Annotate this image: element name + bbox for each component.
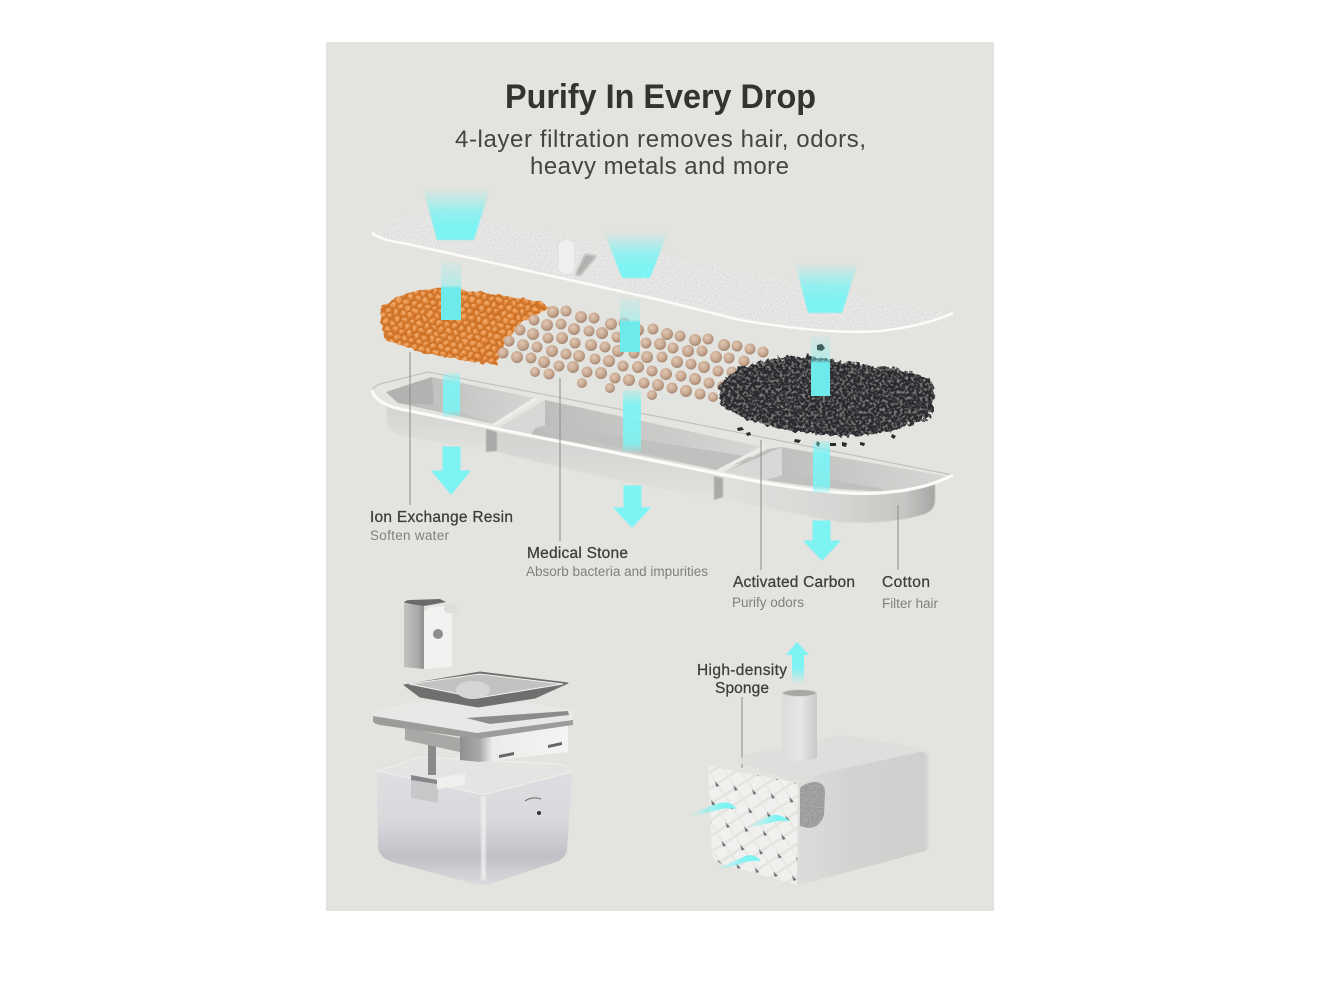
funnel three: [795, 262, 858, 313]
skirt one: [387, 402, 497, 453]
arrow one: [432, 447, 470, 494]
filter cap: [411, 775, 437, 784]
label: ion exchange resin: [370, 509, 513, 543]
pump knob: [433, 629, 443, 639]
funnel two: [604, 232, 668, 278]
label: activated carbon: [732, 574, 855, 610]
column one upper: [441, 262, 461, 320]
pump head top: [404, 599, 446, 606]
funnel one: [423, 188, 490, 240]
cotton pad: [372, 208, 953, 331]
skirt two: [497, 432, 715, 500]
compartment one side wall: [386, 377, 434, 405]
water flow: funnels and columns: [423, 188, 858, 560]
pump nozzle: [444, 604, 458, 613]
label: activated carbon: Purify odors: [732, 595, 804, 610]
compartment three: [725, 447, 945, 491]
tray support tabs: [486, 429, 723, 500]
tank: [377, 757, 572, 885]
pump head grey side: [404, 604, 424, 669]
compartment floors: [425, 404, 882, 491]
leader lines: [410, 352, 898, 768]
background panel: [326, 42, 994, 911]
label: high-density sponge: Sponge: [715, 680, 769, 697]
steel tray inner: [409, 674, 563, 698]
up arrow: [786, 642, 809, 684]
front white rim edge: [372, 390, 953, 494]
pump side: [797, 752, 931, 885]
lid slots: [499, 742, 562, 758]
cotton pad white edge: [372, 233, 953, 332]
lid top plate: [373, 703, 573, 738]
column three lower: [813, 441, 830, 493]
tray dome: [456, 681, 490, 699]
carbon mass: [719, 356, 935, 437]
center post: [559, 240, 574, 274]
label: high-density sponge: [697, 662, 787, 697]
pole: [428, 743, 436, 775]
tank highlight: [481, 796, 486, 880]
activated carbon granules: [719, 344, 935, 447]
tank indicator: [537, 811, 541, 815]
lid recess: [466, 711, 569, 724]
label: high-density sponge: High-density: [697, 662, 787, 679]
label: ion exchange resin: Ion Exchange Resin: [370, 509, 513, 526]
ion exchange resin beads: [380, 287, 550, 365]
column two lower: [623, 390, 641, 452]
compartment one: [386, 377, 535, 424]
label: medical stone: Absorb bacteria and impurities: [526, 564, 708, 579]
label: medical stone: Medical Stone: [527, 545, 628, 562]
column two upper: [620, 298, 640, 352]
loose granules: [737, 344, 896, 447]
arrow two: [614, 486, 650, 527]
label: activated carbon: Activated Carbon: [733, 574, 855, 591]
column three upper: [811, 336, 830, 396]
swoosh one: [688, 802, 737, 816]
tray: bottom layer housing: [372, 372, 953, 523]
medical stone beads: [498, 306, 768, 402]
label: cotton: [882, 574, 938, 611]
submersible pump with sponge: [688, 642, 931, 885]
column one lower: [443, 373, 460, 417]
tank logo: [525, 798, 541, 801]
skirt three: [722, 475, 935, 523]
tube opening: [782, 690, 816, 696]
white pump block: [437, 773, 465, 789]
mesh face: [708, 767, 798, 885]
swoosh three: [714, 855, 761, 870]
pump head white face: [424, 606, 452, 669]
top layer: cotton filter: [372, 208, 953, 332]
label: cotton: Filter hair: [882, 596, 938, 611]
tank filter block: [411, 776, 438, 803]
swoosh two: [746, 815, 790, 828]
lid front edge: [373, 716, 573, 739]
steel tray: [404, 672, 568, 707]
fountain exploded view: [373, 599, 573, 885]
lid underside: [405, 728, 460, 752]
dividers: [494, 398, 764, 471]
arrow three: [804, 521, 840, 560]
lid body: [460, 725, 568, 762]
sponge window: [800, 782, 825, 828]
label: medical stone: [526, 545, 708, 579]
label: ion exchange resin: Soften water: [370, 528, 450, 543]
subtitle: [455, 126, 866, 180]
compartment two: [499, 400, 762, 470]
tray rim: [372, 372, 953, 493]
tube: [782, 694, 817, 761]
tank rim: [377, 757, 572, 794]
title: Purify In Every Drop: [505, 78, 816, 116]
subtitle: 4-layer filtration removes hair, odors,: [455, 126, 866, 153]
pump top surface: [737, 735, 930, 783]
compartment three side wall: [725, 447, 782, 480]
label: cotton: Cotton: [882, 574, 930, 591]
post shadow: [575, 254, 597, 276]
subtitle: heavy metals and more: [530, 153, 789, 180]
compartment two side wall: [499, 400, 545, 437]
